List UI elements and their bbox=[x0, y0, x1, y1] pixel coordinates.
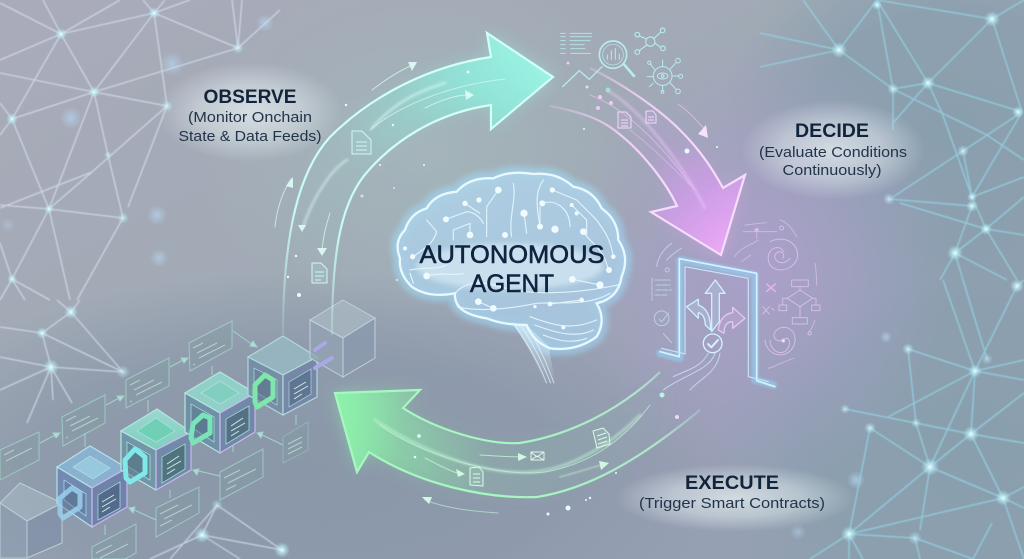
icon: task list left bbox=[652, 243, 682, 343]
label: decide: DECIDE bbox=[795, 121, 869, 142]
icon: flowchart bbox=[779, 280, 820, 324]
data cards bbox=[0, 321, 308, 559]
icon: spirals bbox=[765, 239, 798, 355]
chain links bbox=[60, 343, 332, 518]
cube 6 grey bbox=[310, 300, 375, 377]
label: decide bbox=[759, 121, 907, 179]
icon: decision door bbox=[652, 220, 820, 390]
decide small arrowhead bbox=[698, 125, 708, 138]
icon: cross marks bbox=[767, 284, 775, 291]
blockchain bbox=[0, 300, 375, 559]
network background left bbox=[0, 0, 282, 559]
sparkles bbox=[287, 62, 718, 516]
execute small arrowheads bbox=[422, 453, 609, 504]
title: autonomous agent: AGENT bbox=[470, 270, 554, 298]
label: observe bbox=[178, 86, 322, 145]
icon: network graph bbox=[635, 28, 665, 54]
icon: eye hub bbox=[647, 58, 683, 94]
title: autonomous agent: AUTONOMOUS bbox=[420, 241, 604, 269]
label: observe: (Monitor Onchain bbox=[188, 109, 312, 126]
brain outline bbox=[398, 173, 625, 349]
execute stream wisps bbox=[375, 405, 650, 513]
label: execute: (Trigger Smart Contracts) bbox=[639, 495, 825, 512]
brain stem bbox=[512, 323, 556, 383]
icon: branching arrows bbox=[687, 280, 745, 333]
label: execute bbox=[639, 472, 825, 512]
brain bbox=[398, 173, 625, 383]
label: decide: Continuously) bbox=[782, 162, 882, 179]
cube 4 teal bbox=[185, 372, 255, 453]
decide stream wisps bbox=[590, 92, 705, 208]
icon: magnifier chart bbox=[563, 41, 634, 87]
brain central glow bbox=[417, 243, 603, 290]
icon: circuit top bbox=[735, 220, 817, 368]
icon: decide documents bbox=[618, 111, 656, 128]
cube 3 teal bbox=[121, 409, 191, 490]
icon: observe documents bbox=[312, 131, 371, 283]
energy stream bbox=[663, 353, 720, 390]
brain nodes bbox=[403, 187, 616, 329]
cube 5 bbox=[248, 336, 317, 415]
cube 1 grey bbox=[0, 483, 62, 558]
arrow: observe (teal) bbox=[275, 33, 553, 335]
cube 2 blue bbox=[57, 446, 127, 527]
icon: check circle bbox=[703, 334, 722, 353]
card text lines bbox=[4, 343, 302, 558]
icons: data analysis bbox=[561, 28, 683, 94]
icon: data table bbox=[561, 33, 592, 53]
label: observe: State & Data Feeds) bbox=[178, 128, 322, 145]
label: decide: (Evaluate Conditions bbox=[759, 144, 907, 161]
label halos bbox=[158, 62, 925, 532]
observe small arrowheads bbox=[286, 62, 474, 256]
icon: execute documents bbox=[470, 428, 610, 486]
network nodes right bbox=[831, 0, 1024, 545]
label: observe: OBSERVE bbox=[204, 86, 296, 108]
arrow: execute (green) bbox=[335, 372, 700, 513]
icon: decision symbols right bbox=[735, 220, 820, 368]
network nodes left bbox=[6, 7, 290, 558]
connector arrows bbox=[40, 331, 296, 535]
label: execute: EXECUTE bbox=[685, 472, 779, 494]
brain folds bbox=[410, 180, 618, 341]
arrow: decide (purple) bbox=[550, 65, 745, 255]
network background right bbox=[760, 0, 1024, 559]
title: autonomous agent bbox=[420, 241, 604, 298]
observe stream wisps bbox=[275, 64, 505, 250]
